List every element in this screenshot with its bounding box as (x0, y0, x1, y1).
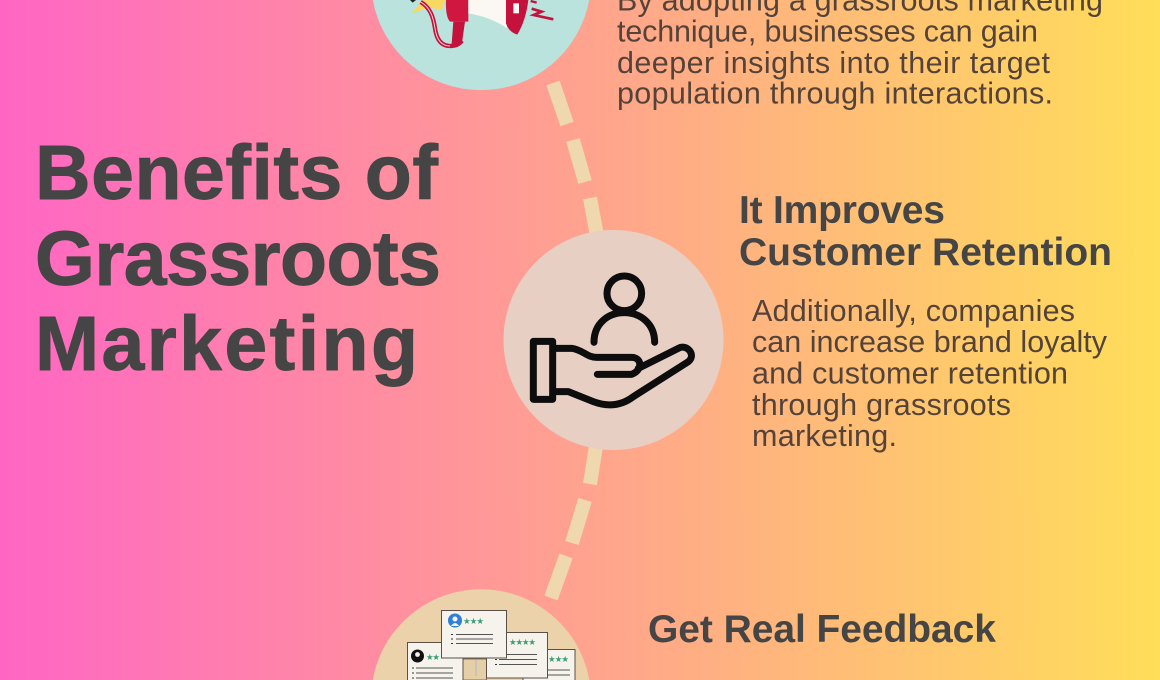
text block: customer retention: through grassroots (752, 388, 1011, 422)
text block: insights (617, 0, 1103, 110)
review card: top center: ★★★ (463, 617, 484, 627)
text block: customer retention: and customer retention (752, 356, 1068, 390)
review card: right back (523, 650, 575, 680)
text block: insights: technique, businesses can gain (617, 14, 1038, 48)
icon: megaphone in teal circle (373, 0, 589, 90)
review card: right front: ★★★★ (509, 638, 536, 648)
review card: lower left: ★★ (426, 653, 440, 663)
title: Grassroots (35, 216, 441, 302)
review card: lower left (408, 642, 463, 680)
text block: customer retention: Additionally, companies (752, 294, 1075, 328)
text block: insights: deeper insights into their target (617, 46, 1051, 80)
review card: top center (442, 610, 506, 658)
text block: customer retention: marketing. (752, 419, 897, 453)
text block: insights: population through interactions. (617, 76, 1053, 110)
review card: right front (486, 632, 548, 678)
heading: real feedback: Get Real Feedback (648, 608, 996, 651)
title: Marketing (35, 301, 418, 387)
review card: right back: ★★★ (548, 655, 569, 665)
icon: hand holding person in circle (504, 230, 724, 450)
dashed path connecting circles (551, 83, 597, 598)
text block: customer retention: can increase brand loyalty (752, 325, 1108, 359)
title: Benefits of (35, 130, 438, 216)
icon: customer reviews in circle (373, 589, 589, 680)
title (35, 130, 441, 387)
heading: customer retention: Customer Retention (739, 231, 1112, 274)
heading: customer retention: It Improves (739, 189, 945, 232)
center card fragment (462, 659, 486, 680)
heading: customer retention (739, 189, 1112, 274)
text block: customer retention (752, 294, 1108, 453)
